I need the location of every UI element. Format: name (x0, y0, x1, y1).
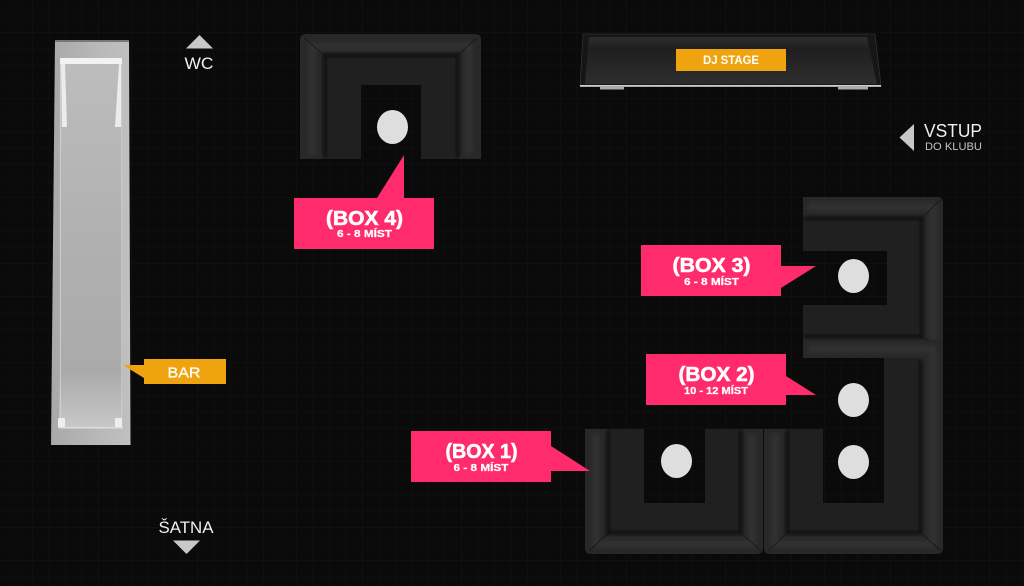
icon: cloakroom arrow down (173, 540, 200, 554)
sofa: box 2 (764, 340, 943, 554)
table lower (838, 445, 869, 479)
callout: box 3: 6 - 8 MÍST (684, 275, 740, 288)
bar counter (51, 40, 130, 445)
cloakroom direction (158, 518, 214, 554)
DJ STAGE label (676, 49, 786, 71)
callout: box 4 (294, 155, 434, 249)
sofa: box 1 (585, 429, 763, 554)
table upper (838, 383, 869, 417)
BAR callout (123, 359, 226, 384)
BAR callout: BAR (168, 364, 201, 382)
sofa: box 4 (300, 34, 481, 159)
VSTUP label: VSTUP (924, 121, 982, 141)
table (838, 259, 869, 293)
club entrance (900, 121, 982, 153)
DJ stage (580, 34, 881, 90)
icon: WC arrow up (186, 35, 213, 48)
DJ stage: DJ STAGE (703, 53, 759, 67)
ŠATNA label: ŠATNA (158, 518, 214, 537)
callout: box 3: (BOX 3) (672, 255, 750, 277)
table (377, 110, 408, 144)
DO KLUBU label: DO KLUBU (925, 141, 982, 153)
icon: entrance arrow left (900, 124, 914, 151)
callout: box 2: 10 - 12 MÍST (684, 384, 749, 397)
table (661, 444, 692, 478)
callout: box 2 (646, 354, 816, 405)
callout: box 4: 6 - 8 MÍST (337, 227, 393, 240)
callout: box 3 (641, 245, 816, 296)
WC label: WC (184, 54, 214, 73)
WC direction (184, 35, 214, 73)
callout: box 2: (BOX 2) (678, 364, 754, 386)
callout: box 1: (BOX 1) (446, 441, 518, 463)
callout: box 4: (BOX 4) (326, 208, 403, 230)
callout: box 1 (411, 431, 590, 482)
callout: box 1: 6 - 8 MÍST (454, 461, 509, 474)
sofa: box 3 (803, 197, 943, 348)
